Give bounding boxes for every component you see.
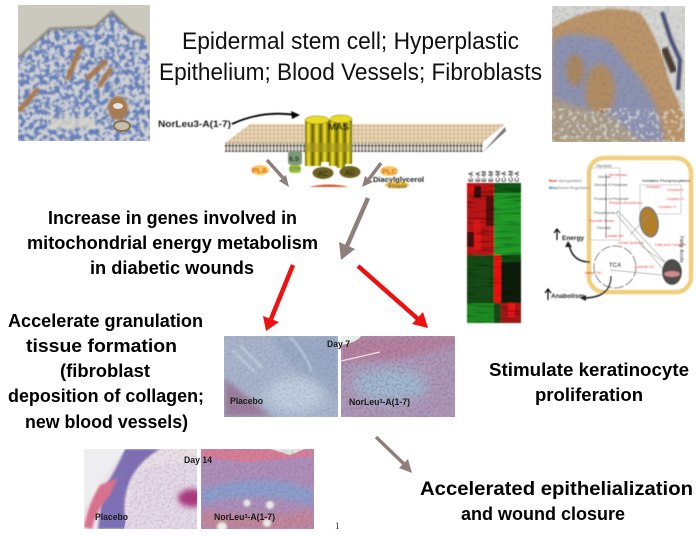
receptor: MAS channel: MAS	[328, 122, 349, 133]
label: Placebo: Placebo	[95, 512, 128, 522]
arrow: to epithelialization	[376, 437, 405, 465]
receptor: MAS channel	[305, 115, 352, 168]
pathway diagram: mitochondrial metabolism: Complex III	[666, 197, 684, 201]
pathway diagram: mitochondrial metabolism: Energy	[562, 235, 584, 242]
pathway diagram: mitochondrial metabolism: Fructose-6-Phosphate	[594, 197, 629, 201]
micrograph: day 14 placebo	[84, 449, 206, 529]
pathway diagram: mitochondrial metabolism: Glucose-6-Phosphate	[594, 183, 628, 187]
pathway diagram: mitochondrial metabolism: Oxidative Phosphorylation	[642, 179, 691, 183]
mitochondrion	[638, 206, 660, 238]
page number: 1	[335, 521, 340, 531]
sample labels	[469, 171, 521, 182]
text: increase in genes: mitochondrial energy metabolism	[27, 232, 318, 253]
label: PLC	[380, 166, 398, 176]
diagram: cell membrane with receptor: PLC	[382, 167, 398, 176]
text: increase in genes: in diabetic wounds	[90, 257, 254, 278]
arrow: energy output	[569, 244, 590, 262]
micrograph: day 7 NorLeu	[341, 336, 455, 417]
text: stimulate keratinocyte proliferation: proliferation	[535, 384, 643, 405]
title: Epithelium; Blood Vessels; Fibroblasts	[159, 59, 542, 86]
pathway diagram: mitochondrial metabolism: Hexokinase	[609, 173, 627, 177]
text: accelerate granulation: deposition of collagen;	[8, 385, 204, 406]
sample labels: C-M	[509, 171, 515, 182]
legend: Down Regulated	[558, 185, 590, 190]
label: Placebo: Placebo	[230, 396, 263, 406]
text: stimulate keratinocyte proliferation	[489, 359, 689, 405]
text: accelerate granulation	[8, 310, 204, 432]
label: NorLeu3-A(1-7): 3	[244, 514, 247, 520]
label: NorLeu3-A(1-7): NorLeu	[214, 512, 246, 522]
sample labels: E-M	[489, 171, 495, 182]
legend	[549, 178, 590, 190]
heatmap	[467, 171, 521, 323]
label: Fatty Acids: Fatty Acids	[678, 236, 684, 263]
label: Diacylglycerol kinase	[385, 182, 409, 188]
pathway diagram: mitochondrial metabolism: Glycolysis	[596, 164, 612, 168]
sample labels: C-A	[515, 171, 521, 182]
arrow: ligand to receptor	[232, 114, 296, 124]
membrane top surface	[225, 124, 505, 143]
label: Day 14: Day 14	[184, 455, 212, 465]
pathway diagram: mitochondrial metabolism: Complex IV	[658, 205, 677, 209]
diagram: cell membrane with receptor: AC	[318, 171, 328, 178]
pathway diagram: mitochondrial metabolism: Anabolism	[551, 293, 584, 300]
text: accelerate granulation: new blood vessels)	[25, 411, 188, 432]
pathway diagram: mitochondrial metabolism: Lactate DH	[606, 234, 624, 238]
legend: Upregulated	[558, 178, 582, 183]
pathway diagram: mitochondrial metabolism: Fatty Acid Oxidation	[655, 243, 686, 247]
nucleus	[662, 259, 682, 285]
diagram: cell membrane with receptor: AC	[345, 170, 355, 177]
pathway diagram: mitochondrial metabolism: Pyruvate Kinase	[589, 219, 615, 223]
micrograph: epidermal stem cell staining	[18, 5, 150, 141]
pathway diagram: mitochondrial metabolism: Complex II	[667, 188, 684, 192]
label: NorLeu3-A(1-7): -A(1-7)	[382, 397, 410, 407]
title	[159, 28, 542, 86]
pathway diagram: mitochondrial metabolism: Phosphoenol-A	[594, 211, 619, 215]
micrograph: day 14 NorLeu	[201, 449, 314, 532]
cell outline	[589, 158, 691, 292]
arrow: red to granulation	[271, 265, 293, 319]
lipid bilayer	[225, 143, 483, 152]
Energy up	[554, 229, 560, 240]
pathway diagram: mitochondrial metabolism: Pyruvate	[597, 226, 611, 230]
legend: Red	[549, 178, 557, 183]
text: accelerated epithelialization: Accelerated epithelialization	[420, 479, 693, 500]
text: accelerate granulation: Accelerate granulation	[8, 310, 203, 331]
arrow: PLA pathway	[267, 160, 284, 179]
diagram: cell membrane with receptor: GTP	[290, 167, 301, 173]
text: stimulate keratinocyte proliferation: Stimulate keratinocyte	[489, 359, 689, 380]
pathway diagram: mitochondrial metabolism: Malate DH	[585, 271, 602, 275]
pathway diagram: mitochondrial metabolism	[545, 158, 691, 301]
sample labels: E-M	[482, 171, 488, 182]
arrow: anabolism output	[583, 276, 611, 298]
diagram: cell membrane with receptor: PLA	[252, 166, 268, 175]
label: NorLeu3-A(1-7): 3	[379, 399, 382, 405]
label: Day 7: Day 7	[327, 339, 350, 349]
effector: AC	[312, 167, 334, 179]
text: accelerated epithelialization: and wound closure	[461, 503, 625, 524]
diagram: cell membrane with receptor: Diacylglycerol	[373, 175, 424, 184]
text: accelerate granulation: tissue formation	[26, 335, 177, 356]
oxidative phosphorylation box	[640, 185, 681, 214]
legend: Blue	[549, 185, 558, 190]
Anabolism up	[545, 289, 551, 300]
text: accelerate granulation: (fibroblast	[60, 360, 150, 381]
pathway lines	[610, 210, 665, 275]
pathway diagram: mitochondrial metabolism: TCA	[609, 263, 622, 269]
pathway diagram: mitochondrial metabolism: Complex I	[646, 185, 662, 189]
label: NorLeu3-A(1-7): -A(1-7)	[247, 512, 275, 522]
micrograph: day 7 placebo	[224, 336, 338, 417]
label: NorLeu3-A(1-7): NorLeu3-A(1-7)	[158, 119, 231, 130]
sample labels: C-A	[502, 171, 508, 182]
text: accelerated epithelialization	[420, 479, 693, 524]
text: increase in genes	[27, 207, 318, 278]
glycolysis box	[590, 168, 620, 240]
title: Epidermal stem cell; Hyperplastic	[182, 28, 519, 55]
micrograph: hyperplastic epithelium staining	[552, 6, 685, 142]
G protein	[288, 151, 302, 165]
pathway diagram: mitochondrial metabolism: Isocitrate DH	[634, 265, 655, 269]
label: PLA	[251, 165, 269, 175]
TCA cycle	[594, 246, 636, 288]
diagram: cell membrane with receptor: kinase	[388, 184, 407, 190]
red-orange cap	[309, 184, 349, 187]
diagram: cell membrane with receptor	[158, 111, 506, 190]
text: increase in genes: Increase in genes involved in	[48, 207, 297, 228]
pathway diagram: mitochondrial metabolism: Glucose	[598, 175, 611, 179]
sample labels: C-M	[496, 171, 502, 182]
label: NorLeu3-A(1-7): NorLeu	[349, 397, 380, 407]
pathway diagram: mitochondrial metabolism: Citrate Synthase	[618, 241, 644, 245]
sample labels: E-A	[476, 171, 482, 182]
arrow: PLC pathway	[369, 163, 381, 179]
arrow: to gene increase	[347, 198, 368, 246]
diagram: cell membrane with receptor: ILS	[289, 156, 300, 163]
sample labels: E-A	[469, 171, 475, 182]
pathway diagram: mitochondrial metabolism: Phospho-fructokinase	[609, 201, 643, 205]
arrow: red to keratinocyte	[358, 266, 418, 319]
